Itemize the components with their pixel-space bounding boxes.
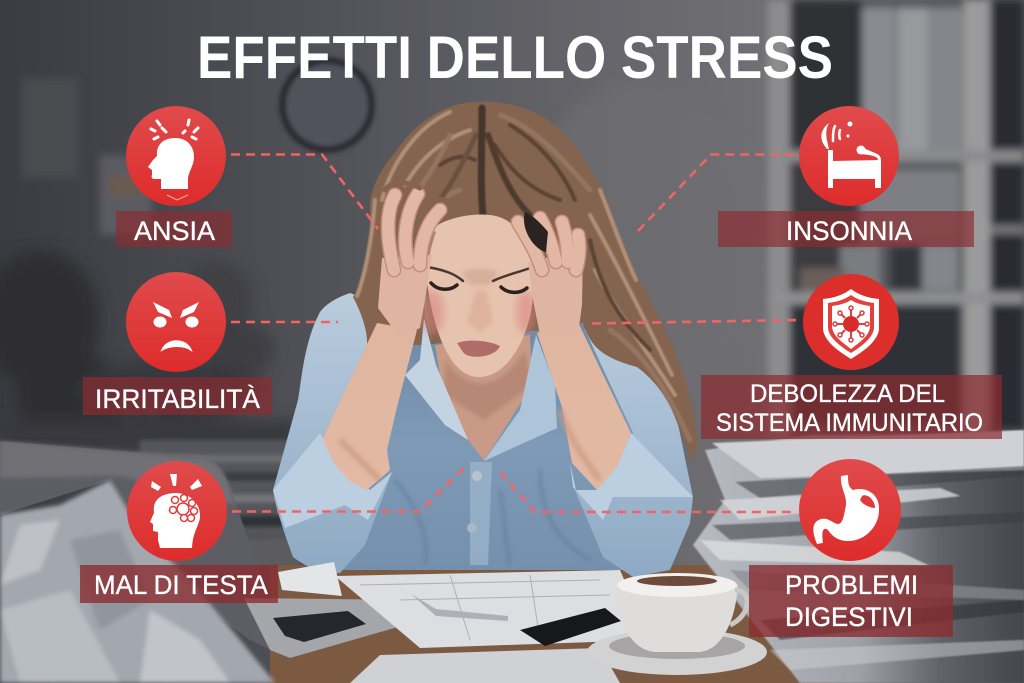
face bbox=[420, 214, 536, 377]
papers behind desk left bbox=[140, 440, 300, 568]
label: problemi digestivi bbox=[749, 565, 953, 637]
label: debolezza del sistema immunitario: SISTEMA IMMUNITARIO bbox=[716, 409, 983, 437]
label: insonnia: INSONNIA bbox=[786, 216, 912, 246]
bookshelf bbox=[768, 0, 1024, 450]
hair silhouette bbox=[353, 102, 698, 462]
forearms bbox=[323, 320, 631, 490]
dashed connector lines bbox=[231, 154, 798, 512]
panel: mal di testa bbox=[80, 461, 278, 603]
shirt folds bbox=[395, 470, 590, 565]
icon: stomach bbox=[799, 459, 901, 561]
panel: debolezza del sistema immunitario bbox=[701, 274, 1002, 439]
panel: insonnia bbox=[718, 106, 974, 247]
coffee cup and saucer bbox=[587, 573, 767, 675]
right collar bbox=[484, 335, 557, 461]
panel: ansia bbox=[116, 106, 232, 247]
label: mal di testa: MAL DI TESTA bbox=[94, 570, 268, 600]
icon: shield with virus bbox=[803, 274, 899, 370]
desk papers bbox=[278, 562, 650, 683]
icon: bed with sleep waves bbox=[799, 106, 899, 206]
label: problemi digestivi: DIGESTIVI bbox=[785, 602, 913, 632]
label: ansia: ANSIA bbox=[134, 216, 215, 246]
hair strands bbox=[357, 108, 690, 440]
icon: head with stress sparks bbox=[126, 106, 226, 206]
left sleeve bbox=[273, 293, 395, 573]
pen bbox=[411, 594, 508, 621]
eyes closed bbox=[431, 283, 527, 292]
phone bbox=[520, 608, 621, 646]
eyebrows bbox=[427, 267, 530, 281]
panel: irritabilita bbox=[83, 272, 272, 415]
neck and chest bbox=[435, 335, 532, 461]
right paper stack bbox=[693, 430, 1024, 683]
laptop bbox=[0, 441, 436, 660]
left collar bbox=[405, 318, 468, 440]
panel: problemi digestivi bbox=[749, 459, 953, 637]
icon: head with brain cluster bbox=[127, 461, 227, 561]
label: irritabilita: IRRITABILITÀ bbox=[95, 384, 260, 414]
label: problemi digestivi: PROBLEMI bbox=[785, 570, 918, 600]
wall frames bbox=[22, 78, 152, 235]
shirt body bbox=[330, 320, 655, 570]
right cuff bbox=[570, 433, 693, 520]
woman bbox=[273, 102, 698, 577]
label: insonnia bbox=[718, 211, 974, 247]
icon: angry face bbox=[126, 272, 226, 372]
hands in hair bbox=[378, 183, 583, 338]
label: debolezza del sistema immunitario bbox=[701, 375, 1002, 439]
crumpled paper bbox=[0, 480, 275, 683]
desk bbox=[270, 565, 830, 683]
right sleeve bbox=[575, 318, 693, 577]
title: EFFETTI DELLO STRESS bbox=[197, 24, 833, 91]
label: ansia bbox=[116, 211, 232, 247]
wall clock bbox=[279, 57, 375, 153]
placket bbox=[470, 462, 492, 565]
label: debolezza del sistema immunitario: DEBOLEZZA DEL bbox=[750, 380, 945, 408]
background plant bbox=[0, 250, 300, 450]
left cuff bbox=[273, 433, 392, 528]
mouth bbox=[457, 341, 500, 357]
